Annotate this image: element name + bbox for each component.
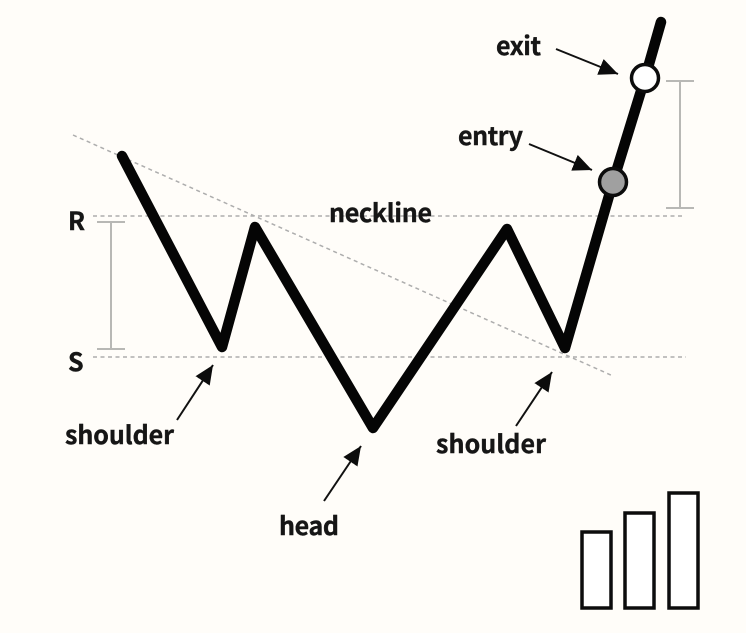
label: R: R xyxy=(68,202,85,238)
arrow: exit xyxy=(556,49,618,74)
arrow: head xyxy=(324,446,361,501)
label: neckline: neckline xyxy=(329,194,432,230)
label: entry: entry xyxy=(458,117,524,153)
label: exit: exit xyxy=(496,27,541,63)
arrow: entry xyxy=(529,144,592,170)
label: S: S xyxy=(68,343,84,379)
label: right shoulder: shoulder xyxy=(436,425,546,461)
target range bracket xyxy=(666,81,694,208)
volume bars xyxy=(582,493,698,608)
support-resistance range bracket xyxy=(97,222,125,349)
label: left shoulder: shoulder xyxy=(65,416,174,452)
label: head: head xyxy=(279,507,339,543)
price line xyxy=(122,22,661,428)
arrow: left shoulder xyxy=(177,365,213,420)
exit marker xyxy=(632,64,658,92)
arrow: right shoulder xyxy=(516,372,552,426)
entry marker xyxy=(600,168,626,196)
